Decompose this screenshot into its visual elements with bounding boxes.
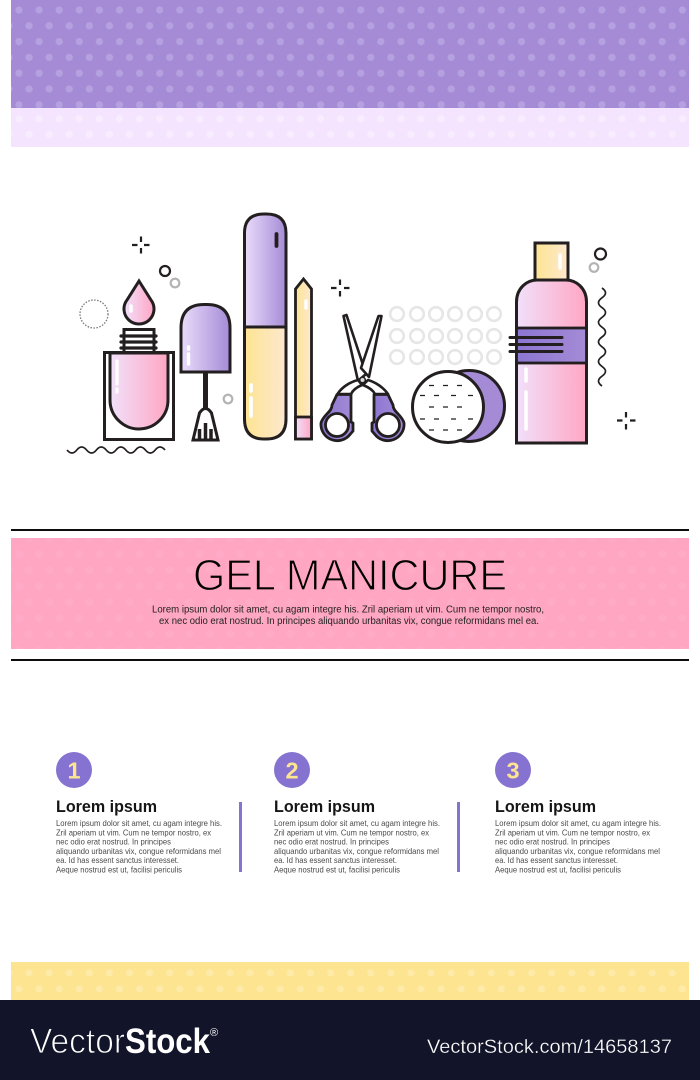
header band xyxy=(11,0,689,147)
body text 2 xyxy=(274,818,440,874)
body text 2: aliquando urbanitas vix, congue reformidans mel xyxy=(274,846,439,856)
icon: sparkle top left xyxy=(132,236,150,254)
footer logo: ® xyxy=(210,1027,218,1039)
number badge 1: 1 xyxy=(67,758,81,784)
title banner xyxy=(11,538,689,649)
icon: scissors xyxy=(321,315,404,441)
body text 1: nec odio erat nostrud. In principes xyxy=(56,837,171,847)
divider 2 xyxy=(457,802,460,872)
body text 2: Zril aperiam ut vim. Cum ne tempor nostro, ex xyxy=(274,827,430,837)
icon: nail buffer file xyxy=(244,214,286,439)
icon: small circles left xyxy=(160,266,179,287)
body text 3: Zril aperiam ut vim. Cum ne tempor nostro, ex xyxy=(495,827,651,837)
heading 3: Lorem ipsum xyxy=(495,798,596,816)
footer url: VectorStock.com/14658137 xyxy=(427,1037,672,1058)
icon: circles right xyxy=(590,248,606,272)
footer logo: Stock xyxy=(125,1022,210,1061)
number badge 2: 2 xyxy=(285,758,299,784)
body text 3 xyxy=(495,818,661,874)
illustration: manicure tools xyxy=(67,214,636,453)
watermark footer xyxy=(0,1000,700,1080)
subtitle text: Lorem ipsum dolor sit amet, cu agam integre his. Zril aperiam ut vim. Cum ne tempor nostro, xyxy=(152,604,544,616)
footer logo xyxy=(30,1022,218,1061)
icon: decorative grey ring grid xyxy=(390,307,501,364)
column 3 xyxy=(495,752,661,874)
column 1 xyxy=(56,752,222,874)
column 2 xyxy=(274,752,440,874)
title: GEL MANICURE xyxy=(193,551,507,600)
body text 2: nec odio erat nostrud. In principes xyxy=(274,837,389,847)
body text 1 xyxy=(56,818,222,874)
icon: wavy line right xyxy=(598,288,606,386)
body text 3: ea. Id has essent sanctus interesset. xyxy=(495,855,618,865)
icon: cotton pads xyxy=(412,370,504,442)
body text 2: Lorem ipsum dolor sit amet, cu agam integre his. xyxy=(274,818,440,828)
subtitle text xyxy=(152,604,544,627)
number badge 1 xyxy=(56,752,92,788)
footer logo: Vector xyxy=(30,1022,125,1061)
number badge 3: 3 xyxy=(506,758,520,784)
body text 2: ea. Id has essent sanctus interesset. xyxy=(274,855,397,865)
number badge 3 xyxy=(495,752,531,788)
heading 1: Lorem ipsum xyxy=(56,798,157,816)
body text 3: Aeque nostrud est ut, facilisi periculis xyxy=(495,864,621,874)
rule below title banner xyxy=(11,659,689,661)
icon: polish brush xyxy=(181,304,230,440)
icon: grey ring xyxy=(224,395,232,403)
heading 2: Lorem ipsum xyxy=(274,798,375,816)
body text 1: ea. Id has essent sanctus interesset. xyxy=(56,855,179,865)
divider 1 xyxy=(239,802,242,872)
number badge 2 xyxy=(274,752,310,788)
body text 1: aliquando urbanitas vix, congue reformidans mel xyxy=(56,846,221,856)
rule above title banner xyxy=(11,529,689,531)
icon: wavy line bottom left xyxy=(67,447,165,453)
icon: cuticle stick xyxy=(296,279,312,439)
body text 1: Zril aperiam ut vim. Cum ne tempor nostro, ex xyxy=(56,827,212,837)
icon: sparkle right xyxy=(617,412,636,430)
body text 2: Aeque nostrud est ut, facilisi periculis xyxy=(274,864,400,874)
icon: dotted circle xyxy=(80,300,108,328)
body text 3: aliquando urbanitas vix, congue reformidans mel xyxy=(495,846,660,856)
icon: remover bottle xyxy=(510,243,586,443)
body text 1: Lorem ipsum dolor sit amet, cu agam integre his. xyxy=(56,818,222,828)
icon: sparkle centre xyxy=(331,280,350,296)
body text 3: Lorem ipsum dolor sit amet, cu agam integre his. xyxy=(495,818,661,828)
subtitle text: ex nec odio erat nostrud. In principes aliquando urbanitas vix, congue reformidans mel ea. xyxy=(159,616,539,627)
icon: nail polish bottle xyxy=(104,281,174,440)
body text 1: Aeque nostrud est ut, facilisi periculis xyxy=(56,864,182,874)
yellow bottom band xyxy=(11,962,689,1000)
body text 3: nec odio erat nostrud. In principes xyxy=(495,837,610,847)
